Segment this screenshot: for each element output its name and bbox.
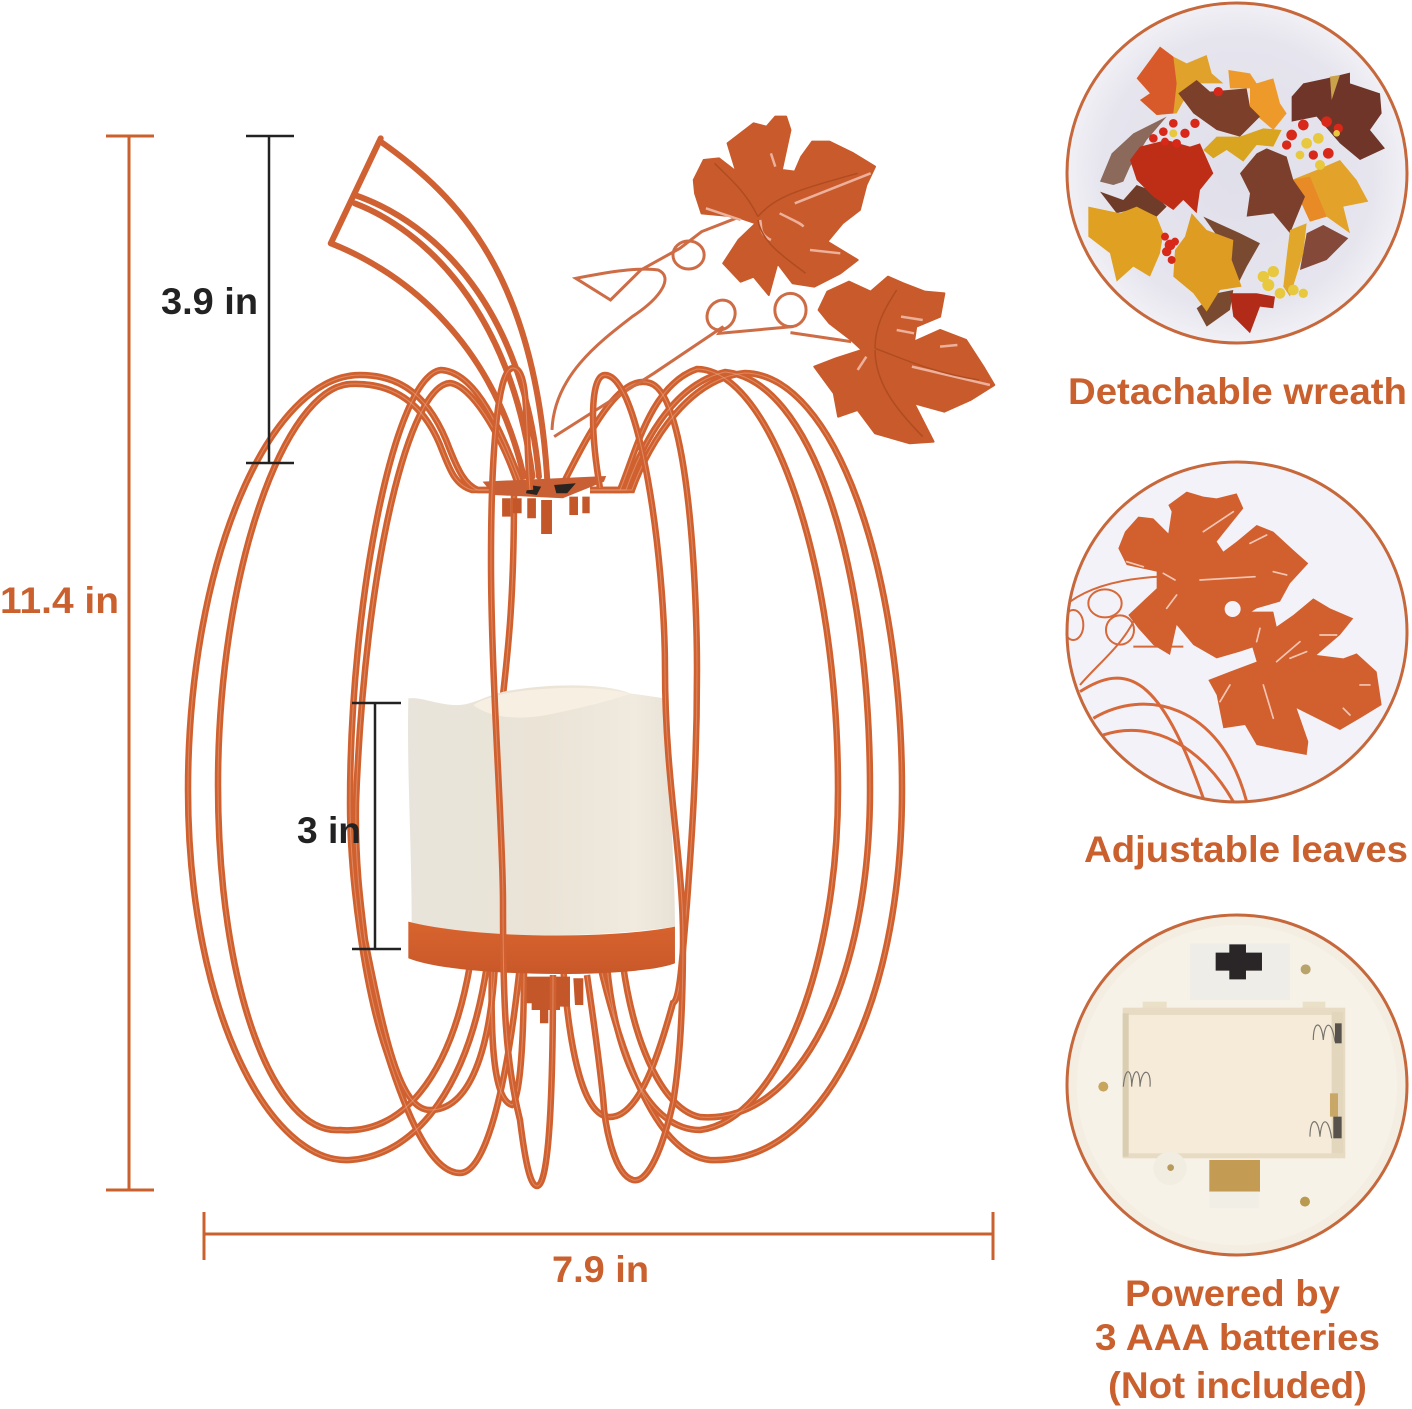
switch [1216,944,1262,979]
springs [1123,1025,1335,1138]
top collar plate with bolts [483,476,606,534]
panel: detachable wreath [1067,3,1407,412]
screw holes [1301,964,1311,974]
dimension: overall height: 11.4 in [0,580,119,621]
dimension: stem height [161,136,294,463]
candle holder ring [408,922,675,974]
leaf upper [694,117,875,295]
label: adjustable leaves: Adjustable leaves [1084,829,1408,870]
red and yellow berries [1149,87,1343,264]
circle photo: leaves [1063,462,1407,802]
dimension: candle height [297,703,401,949]
leaf lower [814,277,994,443]
bottom bolts [527,977,583,1023]
circle photo: wreath [1067,3,1407,343]
circle photo: candle base [1067,915,1407,1255]
label: powered by batteries [1095,1273,1380,1406]
dimension: candle height: 3 in [297,810,361,851]
back wire cage [188,369,902,1173]
dimension: stem height: 3.9 in [161,281,258,322]
dimension: overall width [204,1212,993,1290]
label: detachable wreath: Detachable wreath [1068,371,1407,412]
label: powered by batteries: Powered by [1125,1273,1340,1314]
dimension: overall height [0,136,154,1190]
label: powered by batteries: 3 AAA batteries [1095,1317,1380,1358]
dimension: overall width: 7.9 in [552,1249,649,1290]
gold contact [1209,1160,1260,1192]
battery slot [1143,1002,1167,1008]
panel: adjustable leaves [1063,462,1408,870]
pumpkin lantern product [188,117,994,1186]
label: powered by batteries: (Not included) [1108,1365,1367,1406]
panel: battery compartment [1067,915,1407,1406]
front wire cage [491,368,683,1186]
tendrils [552,217,851,437]
candle [408,685,675,974]
stem wires [331,138,548,487]
